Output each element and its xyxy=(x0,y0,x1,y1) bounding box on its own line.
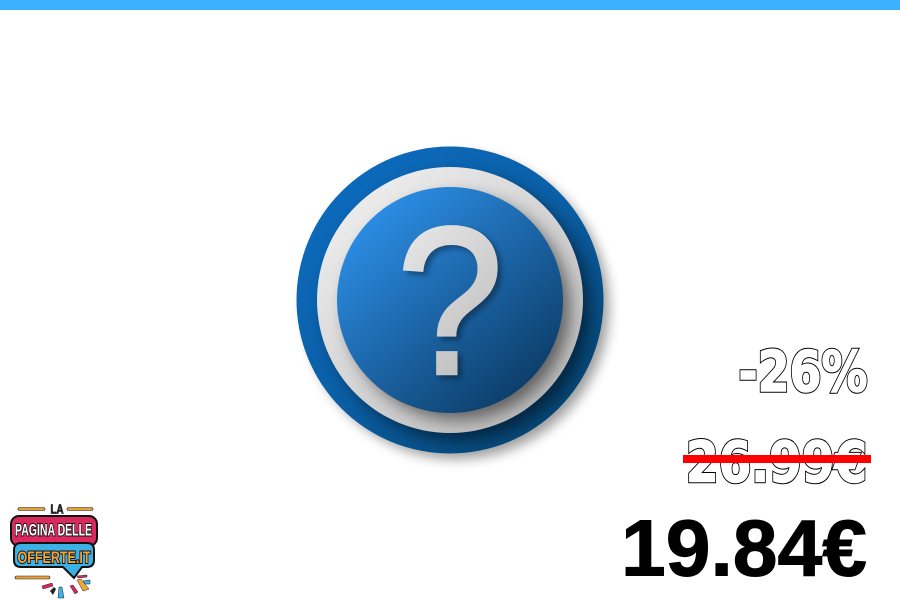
logo top lines xyxy=(18,508,93,510)
logo: La Pagina delle Offerte.it xyxy=(11,502,97,598)
logo word: Pagina delle: PAGINA DELLE xyxy=(15,520,92,540)
logo bottom line xyxy=(15,576,50,579)
logo word: LA: LA xyxy=(50,502,64,516)
old price struck through: 26.99€ xyxy=(686,430,867,496)
old price struck through: 26.99€ xyxy=(686,430,867,496)
top bar xyxy=(0,0,900,10)
logo rays xyxy=(42,575,90,598)
discount percentage: -26% xyxy=(738,340,868,405)
discount percentage: -26% xyxy=(738,340,868,405)
current price: 19.84€ xyxy=(621,504,867,592)
icon: question mark badge xyxy=(296,146,609,459)
logo blue speech bubble xyxy=(14,543,94,578)
logo pink box xyxy=(11,516,97,546)
logo word: Offerte.it: OFFERTE.IT xyxy=(18,549,90,567)
icon: question mark badge: ? xyxy=(397,183,503,418)
icon: question mark badge: ? xyxy=(401,187,507,422)
